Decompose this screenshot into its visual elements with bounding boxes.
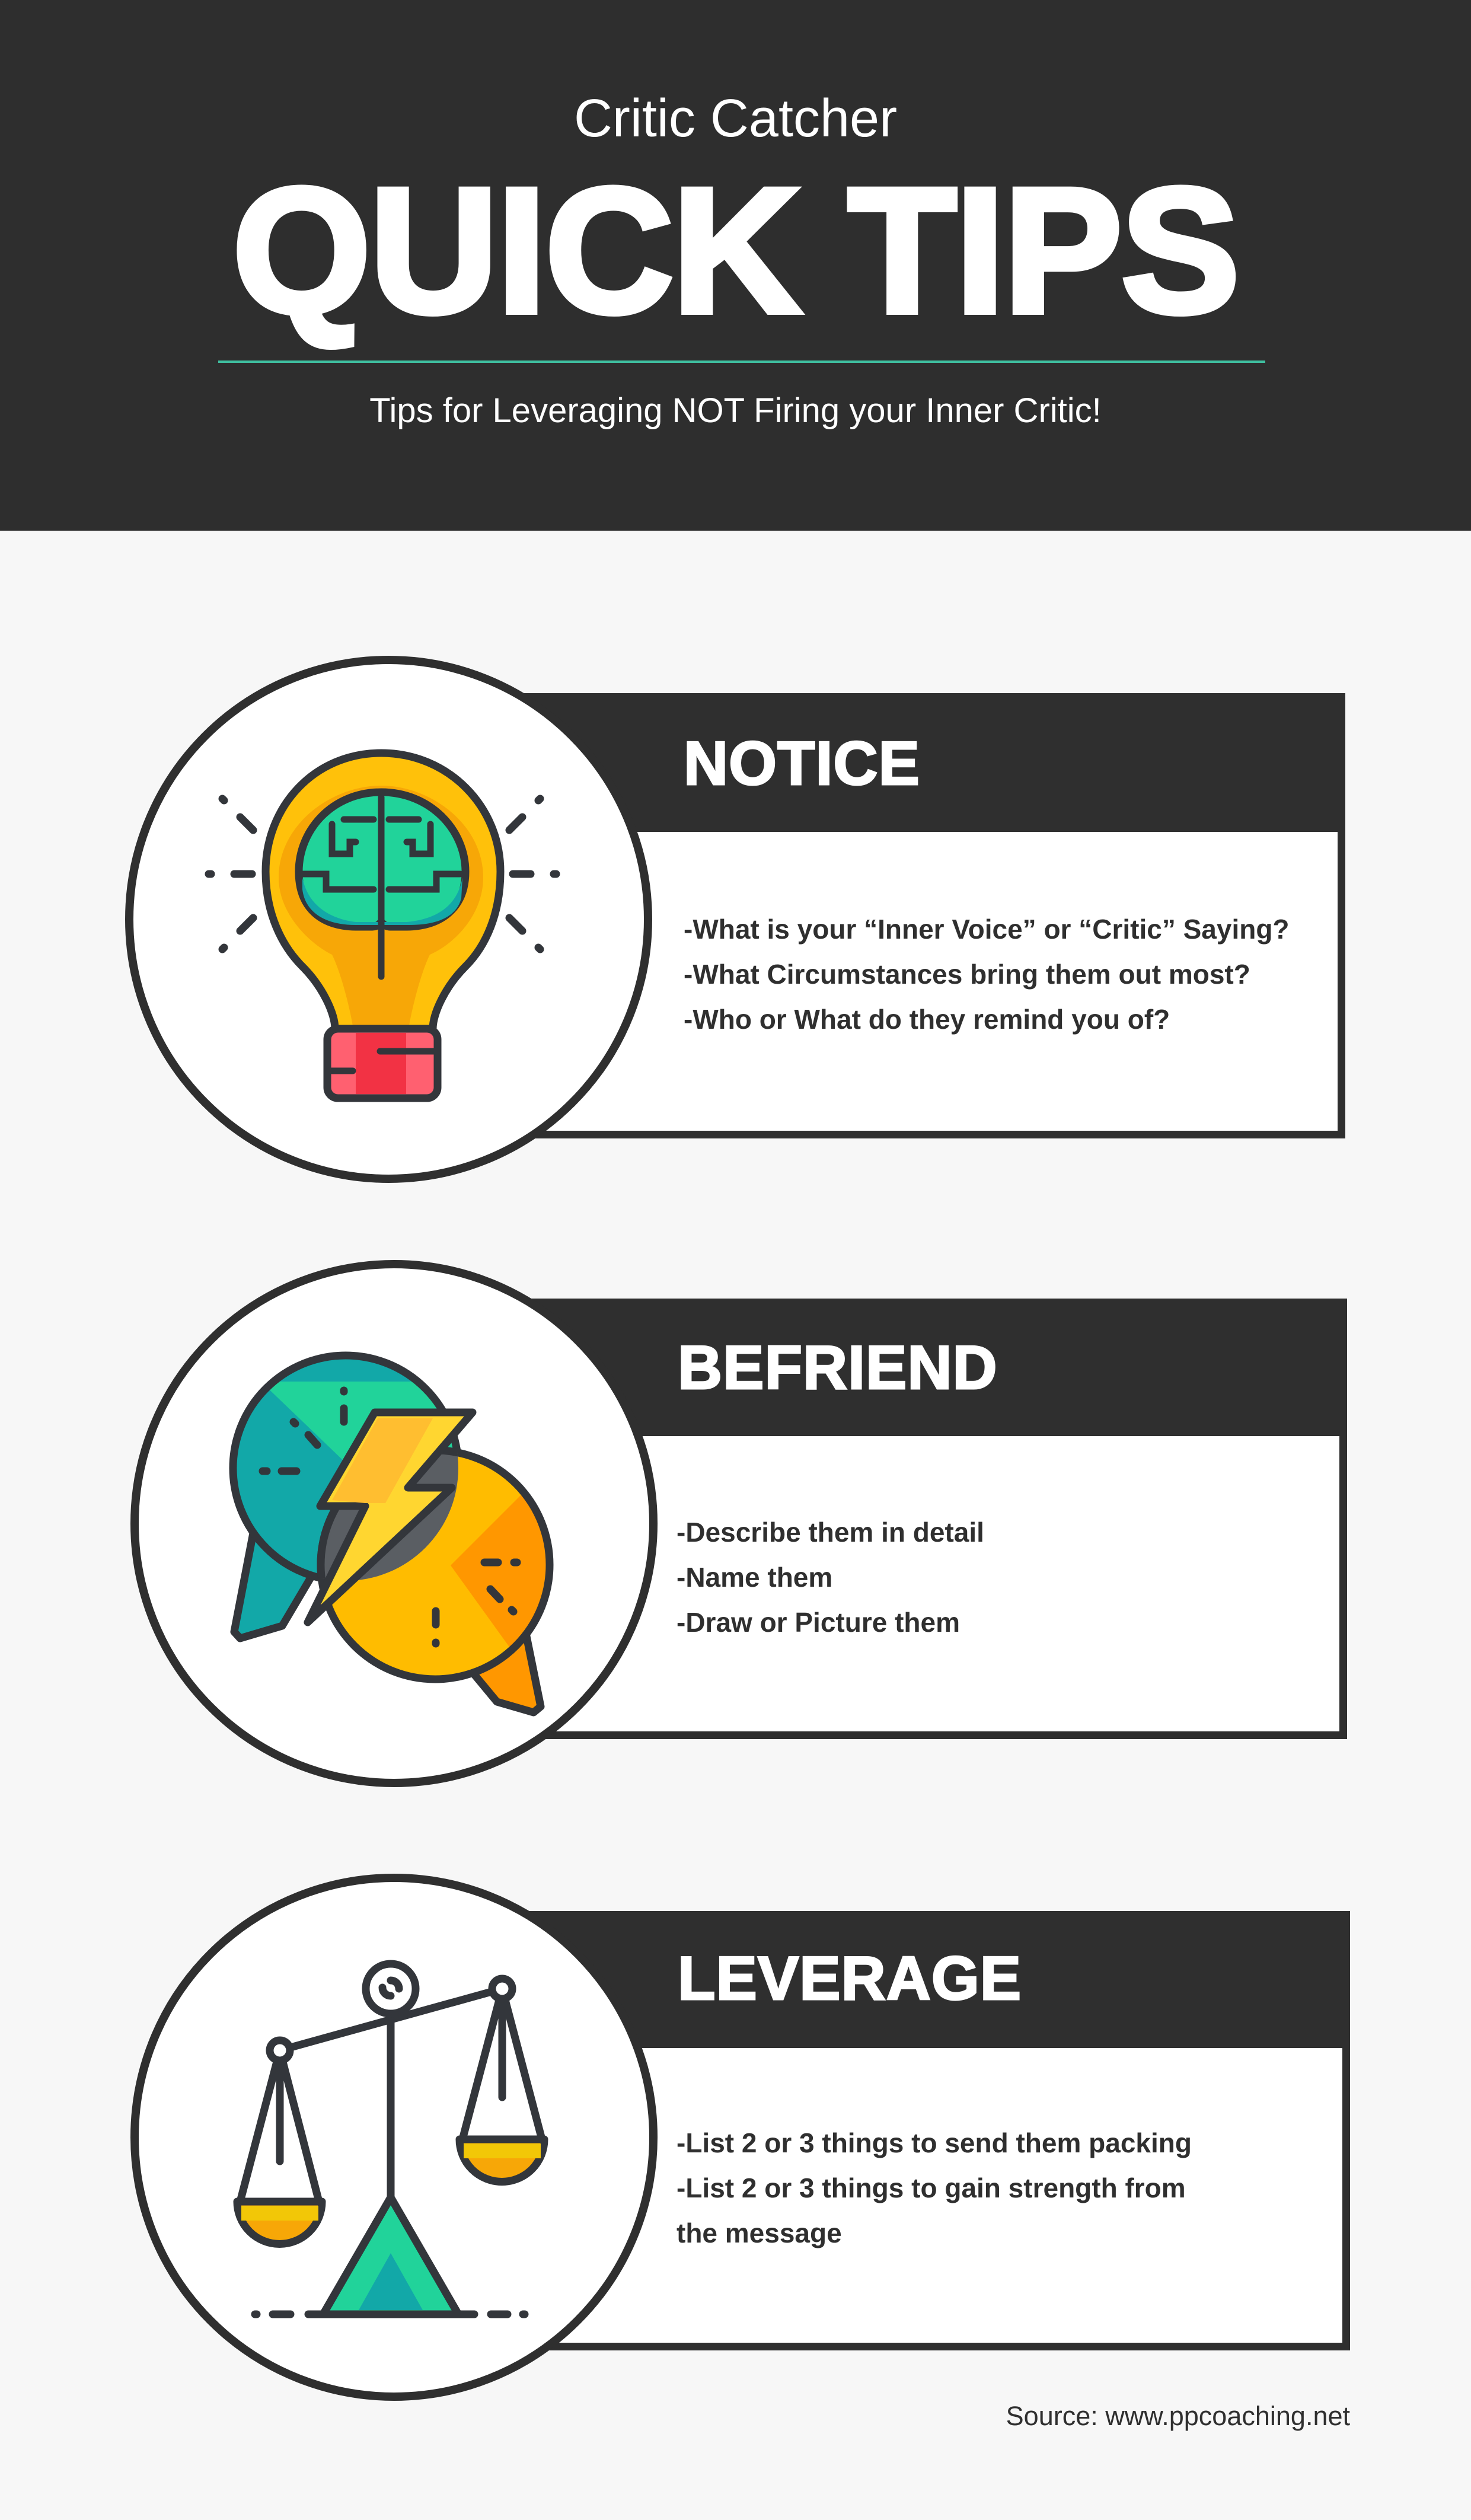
circle (130, 1260, 658, 1787)
panel: notice (125, 656, 1345, 1183)
bullet list: -What is your “Inner Voice” or “Critic” Saying? (684, 914, 1290, 945)
bullet list (677, 2127, 1192, 2248)
bullet list: -Draw or Picture them (677, 1607, 960, 1638)
panel: befriend (130, 1260, 1347, 1787)
header band (0, 0, 1471, 531)
heading: LEVERAGE: LEVERAGE (678, 1944, 1022, 2013)
heading: NOTICE: NOTICE (684, 729, 920, 798)
heading bar (522, 1911, 1350, 2049)
teal divider (218, 361, 1265, 363)
bullet list (684, 914, 1290, 1035)
bullet list: -Describe them in detail (677, 1517, 984, 1548)
bullet list: -List 2 or 3 things to send them packing (677, 2127, 1192, 2158)
bullet list: -Name them (677, 1562, 832, 1593)
icon: lightbulb with brain (205, 749, 560, 1102)
circle (125, 656, 652, 1183)
title: QUICK TIPS: QUICK TIPS (232, 151, 1239, 350)
heading: BEFRIEND: BEFRIEND (678, 1334, 998, 1402)
subtitle: Critic Catcher: Critic Catcher (574, 89, 897, 148)
text box (522, 2048, 1350, 2350)
text box (522, 1436, 1347, 1739)
circle (130, 1874, 658, 2401)
heading bar (516, 693, 1345, 832)
bullet list: the message (677, 2218, 842, 2248)
panel: leverage (130, 1874, 1350, 2401)
bullet list: -What Circumstances bring them out most? (684, 959, 1250, 990)
tagline: Tips for Leveraging NOT Firing your Inner Critic! (369, 391, 1102, 430)
icon: speech bubbles with lightning (229, 1352, 554, 1716)
heading bar (522, 1299, 1347, 1437)
text box (516, 832, 1345, 1138)
bullet list: -List 2 or 3 things to gain strength from (677, 2173, 1186, 2203)
bullet list: -Who or What do they remind you of? (684, 1004, 1170, 1035)
bullet list (677, 1517, 984, 1638)
source footnote: Source: www.ppcoaching.net (1006, 2401, 1350, 2431)
icon: balance scale (234, 1960, 548, 2318)
